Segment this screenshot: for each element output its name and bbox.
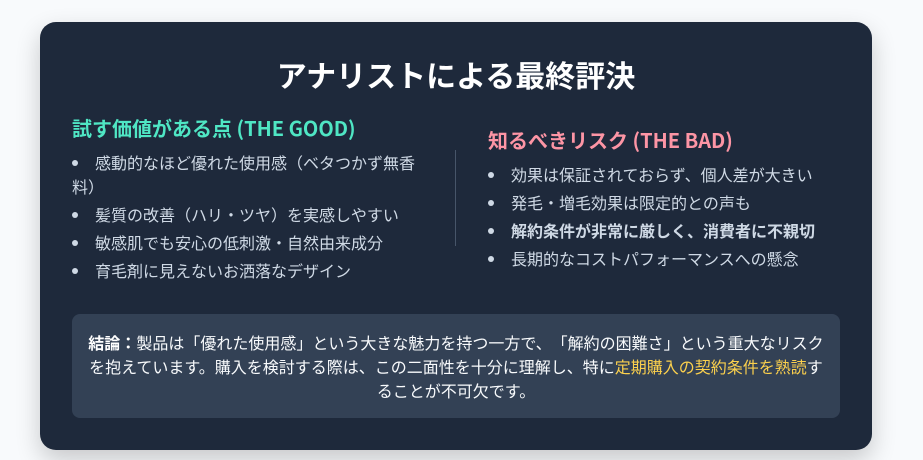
list: the bad points [488,162,815,270]
divider [455,150,456,246]
list: the good points: 髪質の改善（ハリ・ツヤ）を実感しやすい [95,202,399,226]
list: the bad points: 効果は保証されておらず、個人差が大きい [511,162,813,186]
callout: conclusion: 結論：製品は「優れた使用感」という大きな魅力を持つ一方で、「解約の困難さ」という重大なリスクを抱えています。購入を検討する際は、この二面性を十分に理解し、特に定期購入の契約条件を熟読することが不可欠です。 [88,330,824,402]
title: アナリストによる最終評決 [277,52,635,96]
list: the bad points: 解約条件が非常に厳しく、消費者に不親切 [511,218,815,242]
list: the good points: 育毛剤に見えないお洒落なデザイン [95,258,351,282]
panel: the bad [488,125,815,270]
panel: the good [72,113,415,282]
list: the bad points: 発毛・増毛効果は限定的との声も [511,190,751,214]
heading: the bad: 知るべきリスク (THE BAD) [488,125,733,154]
list: the good points [72,150,415,282]
callout: conclusion [72,314,840,418]
list: the good points: 敏感肌でも安心の低刺激・自然由来成分 [95,230,383,254]
list: the bad points: 長期的なコストパフォーマンスへの懸念 [511,246,799,270]
list: the good points: 感動的なほど優れた使用感（ベタつかず無香料） [72,150,415,198]
heading: the good: 試す価値がある点 (THE GOOD) [72,113,356,142]
